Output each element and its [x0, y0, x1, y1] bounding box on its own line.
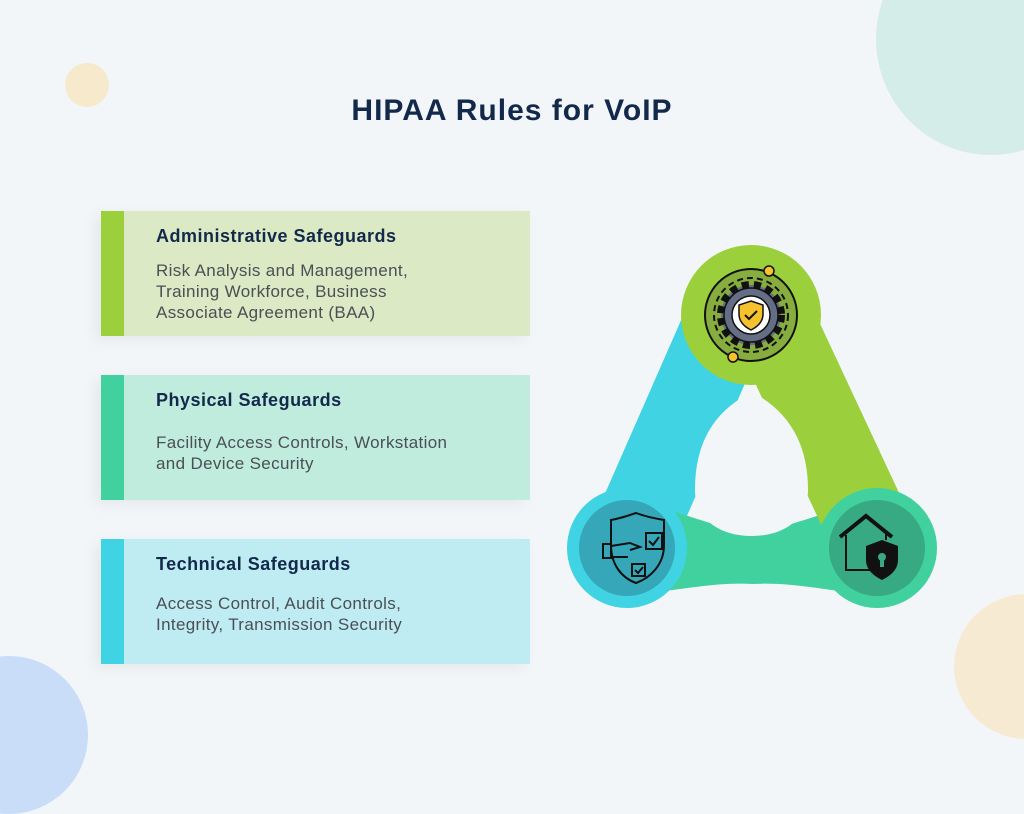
- text: technical: [156, 594, 402, 634]
- text: physical: and Device Security: [156, 454, 314, 473]
- text: physical: Facility Access Controls, Workstation: [156, 433, 447, 452]
- icon: gear with shield (top): [681, 245, 821, 385]
- heading: administrative: Administrative Safeguards: [156, 226, 397, 246]
- text: physical: [156, 433, 447, 473]
- text: technical: Access Control, Audit Controls,: [156, 594, 401, 613]
- text: administrative: Training Workforce, Business: [156, 282, 387, 301]
- panel: technical safeguards: [101, 539, 530, 664]
- heading: physical: Physical Safeguards: [156, 390, 342, 410]
- text: administrative: Risk Analysis and Management,: [156, 261, 408, 280]
- heading: technical: Technical Safeguards: [156, 554, 351, 574]
- text: technical: Integrity, Transmission Security: [156, 615, 402, 634]
- decorative circle bottom-right: [954, 594, 1024, 739]
- icon: house with lock shield (right): [817, 488, 937, 608]
- icon: hand with checklist shield (left): [567, 488, 687, 608]
- title: HIPAA Rules for VoIP: [351, 94, 673, 127]
- panel: physical safeguards: [101, 375, 530, 500]
- decorative circle top-left: [65, 63, 109, 107]
- panel: administrative safeguards: [101, 211, 530, 336]
- text: administrative: [156, 261, 408, 322]
- decorative circle bottom-left: [0, 656, 88, 814]
- decorative circle top-right: [876, 0, 1024, 155]
- text: administrative: Associate Agreement (BAA): [156, 303, 375, 322]
